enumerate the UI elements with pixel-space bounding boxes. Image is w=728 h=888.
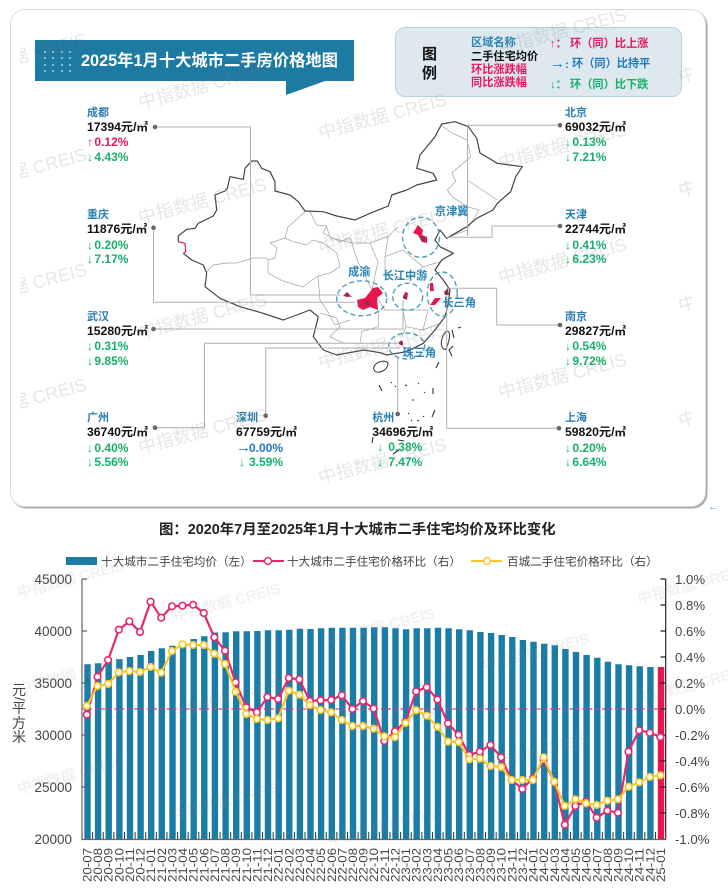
x axis month labels: 22-07 — [337, 848, 349, 882]
city: 南京: 南京 — [565, 310, 587, 322]
city: 广州: 36740元/㎡ — [87, 425, 148, 439]
city: 成都: 4.43% — [94, 150, 128, 164]
x axis month labels: 20-09 — [104, 848, 116, 882]
map: Hainan and Taiwan — [374, 331, 450, 372]
city: 深圳: → — [236, 439, 251, 456]
x axis month labels: 24-07 — [592, 848, 604, 882]
legend box — [395, 27, 682, 97]
watermarks: map card: 中指数据 CREIS — [496, 349, 629, 403]
legend field names: 同比涨跌幅 — [471, 77, 527, 89]
city: 上海: 0.20% — [572, 441, 606, 455]
x axis month labels: 21-04 — [178, 847, 190, 882]
x axis month labels: 21-09 — [231, 848, 243, 882]
city: 北京: ↓ — [565, 135, 571, 149]
city: 武汉: 0.31% — [94, 339, 128, 353]
city: 上海: 59820元/㎡ — [565, 425, 626, 439]
x axis month labels: 23-03 — [422, 848, 434, 882]
city: 重庆: 7.17% — [94, 252, 128, 266]
city: 重庆: 重庆 — [87, 209, 109, 221]
city: 天津: 22744元/㎡ — [565, 222, 626, 236]
right axis labels: 0.8% — [675, 598, 705, 613]
x axis month labels: 23-01 — [401, 848, 413, 882]
map: South China Sea islands — [372, 327, 461, 454]
x axis month labels: 24-10 — [624, 848, 636, 882]
city: 天津 — [565, 208, 626, 266]
city: 北京: 69032元/㎡ — [565, 120, 626, 134]
city: 深圳: ↓ — [239, 455, 245, 469]
legend arrow key: ↓： — [550, 79, 567, 91]
watermarks: chart area: 中指数据 CREIS — [15, 556, 126, 602]
city: 杭州: ↓ — [377, 455, 383, 469]
left axis labels: 40000 — [34, 624, 72, 639]
watermarks: chart area: 中指数据 CREIS — [480, 729, 591, 775]
city: 深圳: 深圳 — [236, 412, 258, 424]
watermarks: map card: 中指数据 CREIS — [136, 174, 269, 228]
x axis month labels: 23-10 — [497, 848, 509, 882]
left axis labels: 35000 — [34, 676, 72, 691]
axes and ticks — [82, 579, 666, 840]
watermarks: map card: 中指数据 CREIS — [496, 234, 629, 288]
city: 北京: 0.13% — [572, 135, 606, 149]
right axis labels: -0.8% — [675, 806, 710, 821]
leader dots — [151, 123, 562, 431]
x axis month labels: 23-07 — [465, 848, 477, 882]
city: 重庆: ↓ — [87, 238, 93, 252]
legend arrow key: 环（同）比下跌 — [570, 79, 648, 91]
x axis month labels: 23-04 — [433, 847, 445, 882]
legend field names: 环比涨跌幅 — [471, 64, 527, 76]
x axis month labels: 24-08 — [603, 848, 615, 882]
x axis month labels: 25-01 — [656, 848, 668, 882]
right axis labels: -0.6% — [675, 780, 710, 795]
x axis month labels: 24-09 — [614, 848, 626, 882]
city: 广州: ↓ — [87, 455, 93, 469]
legend field names: 二手住宅均价 — [471, 51, 538, 63]
watermarks: map card: 中指数据 CREIS — [496, 119, 629, 173]
legend arrow key: ↑： — [550, 38, 567, 50]
city: 深圳: 3.59% — [249, 455, 283, 469]
leader lines — [154, 125, 560, 428]
x axis month labels: 22-11 — [380, 848, 392, 882]
x axis month labels: 21-11 — [252, 848, 264, 882]
city: 天津: 0.41% — [572, 238, 606, 252]
watermarks: chart area: 中指数据 CREIS — [325, 604, 436, 650]
city: 重庆: ↓ — [87, 252, 93, 266]
x axis month labels: 22-12 — [390, 848, 402, 882]
watermarks: map card — [20, 4, 692, 488]
city: 天津: 天津 — [565, 209, 587, 221]
right axis labels: -0.2% — [675, 728, 710, 743]
watermarks: map card: 中指数据 CREIS — [136, 59, 269, 113]
watermarks: chart area: 中指数据 CREIS — [171, 579, 282, 625]
map: red city clusters — [343, 225, 441, 346]
region labels: 长三角 — [443, 295, 476, 309]
x axis month labels: 20-11 — [125, 848, 137, 882]
right axis labels: -0.4% — [675, 754, 710, 769]
right axis labels: 0.4% — [675, 650, 705, 665]
x axis month labels — [82, 847, 668, 882]
bar: latest month highlighted — [658, 667, 664, 839]
city: 北京: 7.21% — [572, 150, 606, 164]
city: 重庆: 11876元/㎡ — [87, 222, 147, 236]
city: 广州: 0.40% — [94, 441, 128, 455]
x axis month labels: 22-04 — [306, 847, 318, 882]
x axis month labels: 21-03 — [168, 848, 180, 882]
x axis month labels: 22-09 — [359, 848, 371, 882]
legend field names: 区域名称 — [471, 37, 516, 49]
chart title: 图：2020年7月至2025年1月十大城市二手住宅均价及环比变化 — [159, 522, 556, 538]
city: 武汉 — [87, 310, 148, 368]
left axis labels — [34, 572, 72, 847]
city: 杭州: 0.38% — [388, 440, 422, 454]
left axis unit — [12, 682, 28, 745]
city: 广州: 5.56% — [94, 455, 128, 469]
city: 重庆 — [87, 208, 148, 266]
city: 南京 — [565, 310, 626, 368]
legend arrow key: →: — [550, 55, 569, 72]
city: 武汉: ↓ — [87, 354, 93, 368]
x axis month labels: 24-02 — [539, 848, 551, 882]
city: 上海: ↓ — [565, 455, 571, 469]
x axis month labels: 22-10 — [369, 848, 381, 882]
city: 杭州: 34696元/㎡ — [372, 425, 433, 439]
title: 2025年1月十大城市二手房价格地图 — [81, 52, 338, 70]
right axis labels: -1.0% — [675, 832, 710, 847]
x axis month labels: 22-06 — [327, 848, 339, 882]
x axis month labels: 24-06 — [582, 848, 594, 882]
left axis labels: 20000 — [34, 832, 72, 847]
city: 重庆: 0.20% — [94, 238, 128, 252]
x axis month labels: 24-11 — [635, 848, 647, 882]
watermarks: map card: 中指数据 CREIS — [316, 319, 449, 373]
legend field names — [471, 36, 538, 89]
city: 成都: ↓ — [87, 150, 93, 164]
city: 深圳 — [236, 412, 297, 469]
city: 北京 — [565, 106, 626, 164]
map: dashed region circles — [337, 217, 457, 359]
city: 南京: ↓ — [565, 354, 571, 368]
watermarks: chart area: 中指数据 CREIS — [480, 629, 591, 675]
left axis labels: 25000 — [34, 780, 72, 795]
city: 武汉: ↓ — [87, 339, 93, 353]
x axis month labels: 20-12 — [136, 848, 148, 882]
x axis month labels: 21-10 — [242, 848, 254, 882]
map: province boundaries — [207, 125, 497, 343]
city: 天津: ↓ — [565, 238, 571, 252]
chart legend: 十大城市二手住宅价格环比（右） — [287, 554, 461, 568]
x axis month labels: 23-09 — [486, 848, 498, 882]
right axis labels: 0.2% — [675, 676, 705, 691]
x axis month labels: 23-12 — [518, 848, 530, 882]
watermarks: chart area: 中指数据 CREIS — [15, 652, 126, 698]
right axis labels — [675, 572, 710, 847]
chart legend: 十大城市二手住宅均价（左） — [101, 554, 252, 568]
city: 武汉: 15280元/㎡ — [87, 324, 148, 338]
region labels: 成渝 — [348, 264, 370, 278]
city: 广州: 广州 — [87, 412, 109, 424]
x axis month labels: 20-07 — [82, 848, 94, 882]
banner background with tail — [35, 40, 354, 95]
x axis month labels: 21-12 — [263, 848, 275, 882]
x axis month labels: 23-02 — [412, 848, 424, 882]
city: 上海 — [565, 412, 626, 469]
city: 杭州 — [372, 412, 434, 469]
left axis unit: 方 — [12, 715, 26, 731]
watermarks: chart area: 中指数据 CREIS — [325, 702, 436, 748]
right axis labels: 1.0% — [675, 572, 705, 587]
city: 深圳: 67759元/㎡ — [236, 425, 297, 439]
x axis month labels: 22-03 — [295, 848, 307, 882]
x axis month labels: 22-01 — [274, 848, 286, 882]
x axis month labels: 24-12 — [645, 848, 657, 882]
city: 武汉: 武汉 — [87, 310, 109, 322]
city: 杭州: ↓ — [377, 440, 383, 454]
icon: small blue arrow: ← — [708, 501, 719, 513]
title banner — [35, 40, 354, 95]
watermarks: map card: 中指数据 CREIS — [316, 89, 449, 143]
map: national outline — [178, 122, 522, 355]
x axis month labels: 20-08 — [93, 848, 105, 882]
line: ten-city month-on-month — [87, 602, 660, 825]
x axis month labels: 20-10 — [114, 848, 126, 882]
x axis month labels: 23-08 — [475, 848, 487, 882]
map: red border segment — [178, 242, 186, 253]
left axis unit: 元 — [12, 682, 26, 698]
panel: map card — [10, 9, 706, 507]
x axis month labels: 21-02 — [157, 848, 169, 882]
left axis unit: 平 — [12, 700, 26, 716]
right axis labels: 0.6% — [675, 624, 705, 639]
watermarks: chart area: 中指数据 CREIS — [325, 804, 436, 850]
region labels: 珠三角 — [403, 345, 436, 359]
line: hundred-city month-on-month — [87, 644, 660, 806]
x axis month labels: 24-01 — [528, 848, 540, 882]
x axis month labels: 23-11 — [507, 848, 519, 882]
bars: ten-city average price — [88, 627, 650, 839]
city: 南京: 9.72% — [572, 354, 606, 368]
watermarks: map card: 中指数据 CREIS — [136, 404, 269, 458]
chart legend — [66, 554, 658, 568]
city: 深圳: 0.00% — [249, 441, 283, 455]
city: 武汉: 9.85% — [94, 354, 128, 368]
left axis labels: 30000 — [34, 728, 72, 743]
city: 广州: ↓ — [87, 441, 93, 455]
region labels: 长江中游 — [383, 269, 427, 283]
x axis month labels: 24-04 — [560, 847, 572, 882]
city: 杭州: 杭州 — [372, 412, 394, 424]
chart legend: 百城二手住宅价格环比（右） — [507, 554, 658, 568]
city: 北京: ↓ — [565, 150, 571, 164]
city: 成都: 成都 — [87, 106, 109, 118]
x axis month labels: 22-05 — [316, 848, 328, 882]
region labels — [348, 204, 476, 359]
city: 天津: ↓ — [565, 252, 571, 266]
legend arrow key: 环（同）比持平 — [572, 58, 650, 70]
map of China with leader lines — [151, 121, 562, 454]
watermarks: chart area: 中指数据 CREIS — [171, 676, 282, 722]
watermarks: chart area — [15, 556, 728, 850]
city: 广州 — [87, 412, 148, 469]
x axis month labels: 21-05 — [189, 848, 201, 882]
watermarks: map card: 中指数据 CREIS — [316, 204, 449, 258]
city: 成都: 0.12% — [94, 135, 128, 149]
x axis month labels: 23-06 — [454, 848, 466, 882]
city: 成都: ↑ — [87, 135, 93, 149]
watermarks: map card: 中指数据 CREIS — [496, 4, 629, 58]
x axis month labels: 22-08 — [348, 848, 360, 882]
legend heading: 图例 — [422, 46, 437, 82]
city: 上海: ↓ — [565, 441, 571, 455]
city: 杭州: 7.47% — [388, 455, 422, 469]
right axis labels: 0.0% — [675, 702, 705, 717]
zero reference line — [82, 708, 666, 710]
map: dark city overlays — [345, 236, 449, 345]
city: 南京: 29827元/㎡ — [565, 324, 626, 338]
city: 上海: 上海 — [565, 412, 587, 424]
x axis month labels: 24-03 — [550, 848, 562, 882]
left axis unit: / — [12, 697, 28, 701]
city: 北京: 北京 — [565, 106, 587, 118]
city: 南京: ↓ — [565, 339, 571, 353]
watermarks: map card: 中指数据 CREIS — [316, 434, 449, 488]
city: 上海: 6.64% — [572, 455, 606, 469]
city: 成都: 17394元/㎡ — [87, 120, 148, 134]
watermarks: map card: 中指数据 CREIS — [136, 289, 269, 343]
x axis month labels: 24-05 — [571, 848, 583, 882]
left axis unit: 米 — [12, 729, 26, 745]
left axis labels: 45000 — [34, 572, 72, 587]
city: 南京: 0.54% — [572, 339, 606, 353]
x axis month labels: 21-07 — [210, 848, 222, 882]
watermarks: chart area: 中指数据 CREIS — [171, 778, 282, 824]
x axis month labels: 21-08 — [221, 848, 233, 882]
x axis month labels: 21-01 — [146, 848, 158, 882]
legend arrow key — [550, 37, 650, 91]
watermarks: chart area: 中指数据 CREIS — [15, 752, 126, 798]
city: 天津: 6.23% — [572, 252, 606, 266]
legend arrow key: 环（同）比上涨 — [570, 38, 648, 50]
x axis month labels: 23-05 — [444, 848, 456, 882]
x axis month labels: 21-06 — [199, 848, 211, 882]
region labels: 京津翼 — [435, 204, 468, 218]
x axis month labels: 22-02 — [284, 848, 296, 882]
city: 成都 — [87, 106, 148, 164]
